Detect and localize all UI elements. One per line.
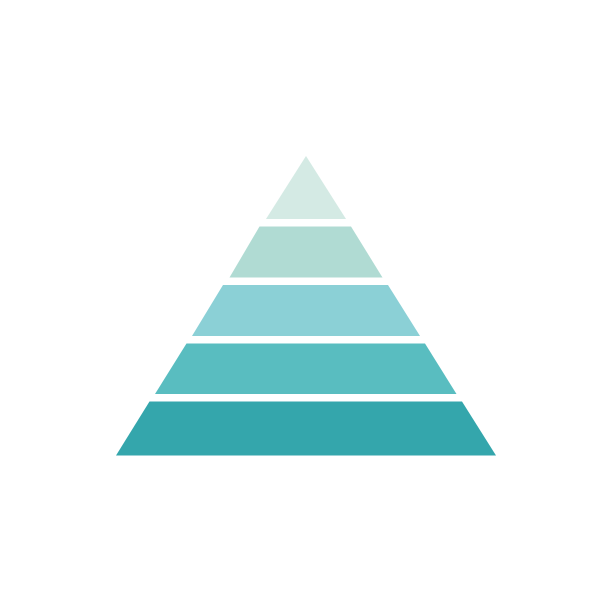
tier 3 [192,285,420,336]
tier 5: base [116,402,496,456]
tier 2 [230,226,382,278]
tier 1: top triangle [266,156,346,219]
tier 4 [155,344,456,394]
